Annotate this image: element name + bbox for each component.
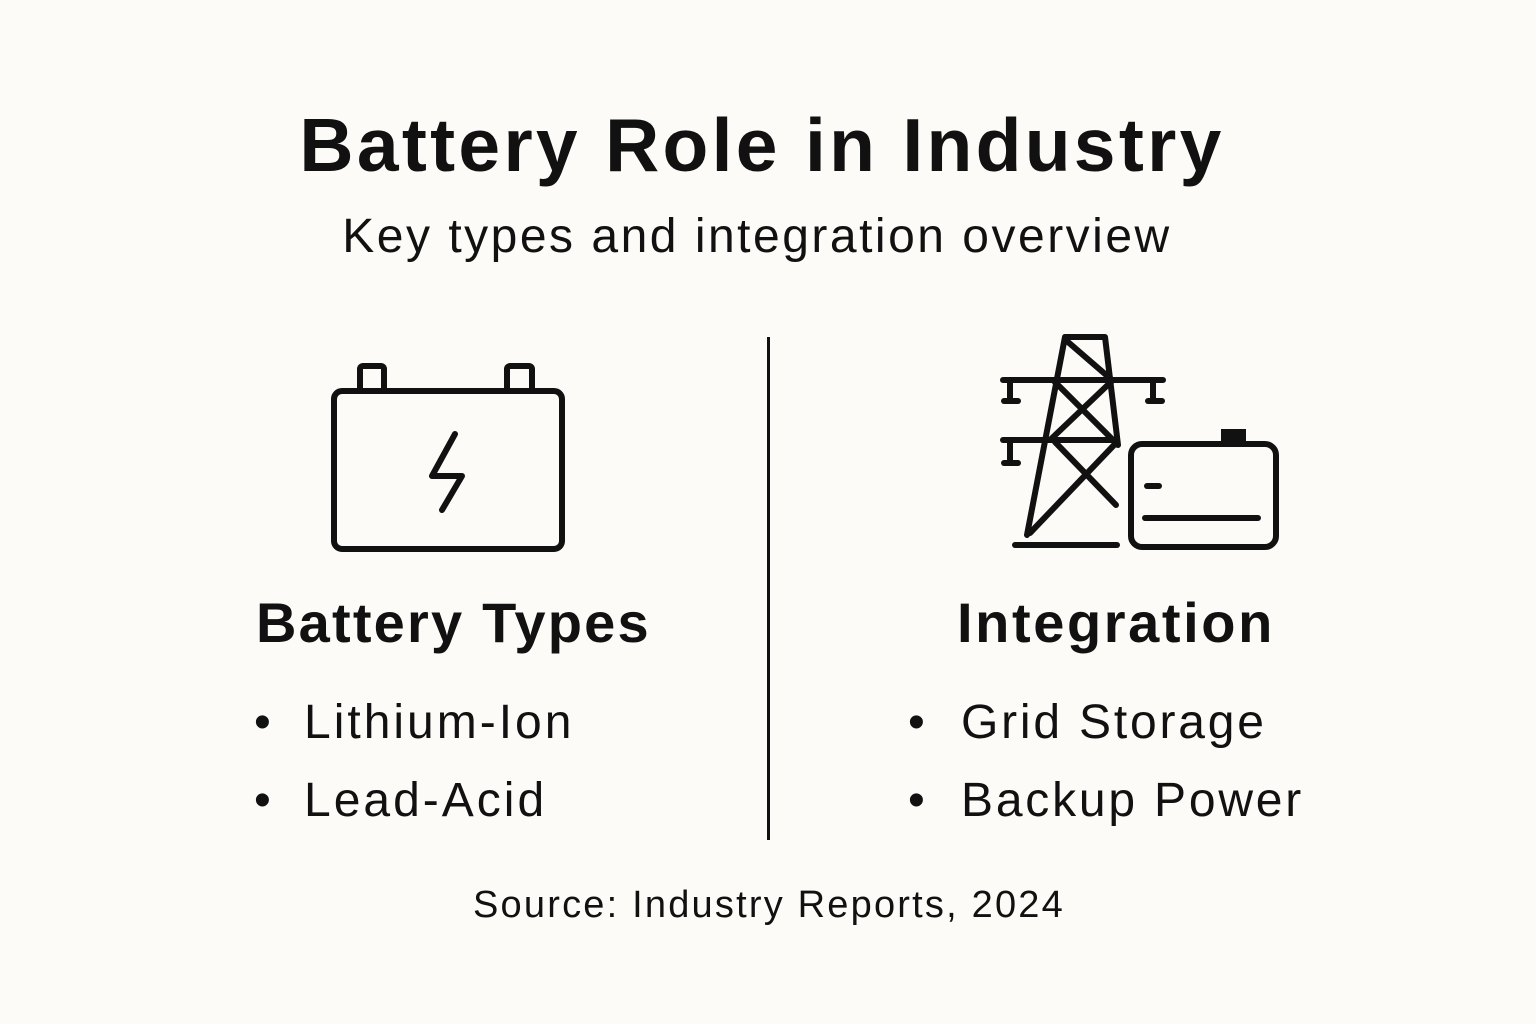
list: integration: • — [908, 696, 928, 749]
list: integration: Backup Power — [961, 774, 1304, 827]
list: battery types: Lithium-Ion — [304, 696, 574, 749]
heading: Integration: Integration — [957, 591, 1275, 654]
list: integration: Grid Storage — [961, 696, 1267, 749]
list: battery types: • — [254, 774, 274, 827]
title: Battery Role in Industry — [299, 103, 1225, 187]
heading: Battery Types: Battery Types — [256, 591, 651, 654]
list: battery types — [254, 696, 574, 827]
list: battery types: Lead-Acid — [304, 774, 547, 827]
subtitle: Key types and integration overview — [342, 210, 1172, 263]
icon: battery — [331, 363, 565, 552]
list: battery types: • — [254, 696, 274, 749]
source note: Source: Industry Reports, 2024 — [473, 884, 1065, 926]
list: integration: • — [908, 774, 928, 827]
icon: tower and battery — [1000, 334, 1279, 550]
divider — [767, 337, 770, 840]
list: integration — [908, 696, 1304, 827]
